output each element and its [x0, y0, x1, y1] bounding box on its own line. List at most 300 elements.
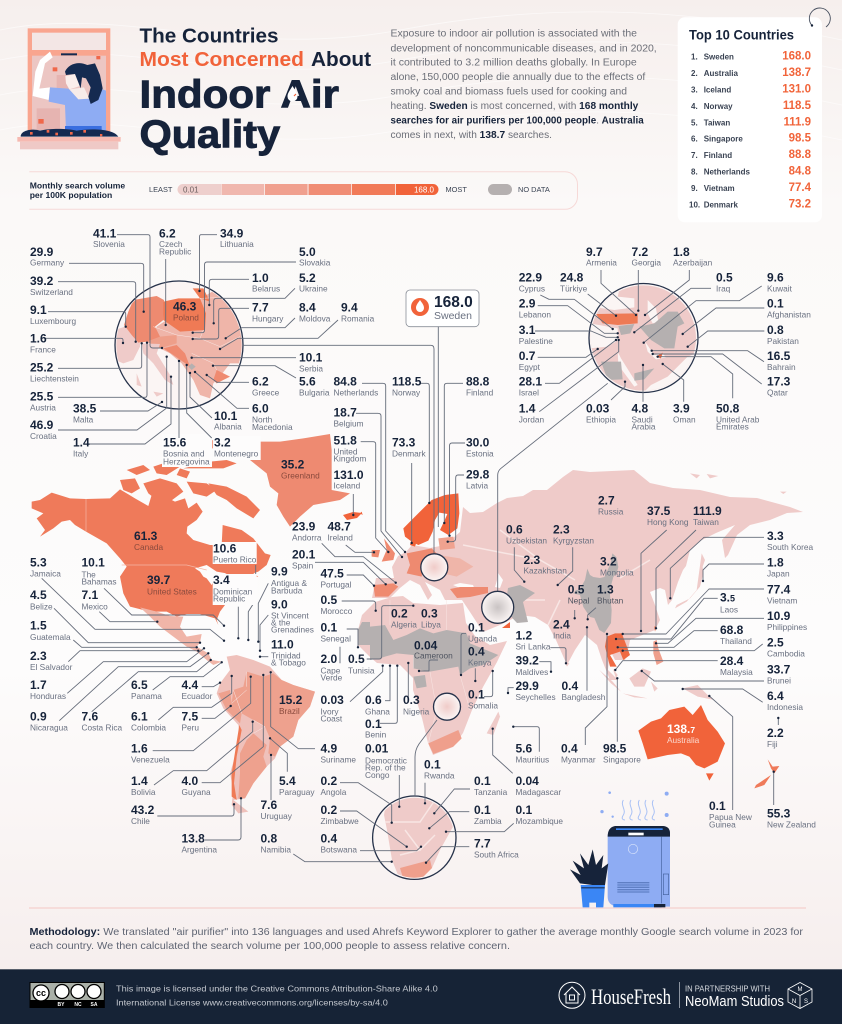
country label: Costa Rica: [82, 660, 211, 733]
country label: Serbia: 10.1: [299, 350, 323, 364]
country label: Netherlands: [334, 375, 405, 552]
country label: Slovenia: 41.1: [93, 226, 117, 240]
map: Asian borders: [463, 530, 650, 625]
country label: Cape Verde: 2.0: [320, 652, 338, 666]
intro text: comes in next, with 138.7 searches.: [390, 130, 552, 141]
country label: Mauritius: [513, 727, 549, 765]
country label: United Kingdom: 51.8: [334, 433, 357, 447]
country label: Denmark: 73.3: [392, 436, 416, 450]
country label: Estonia: Estonia: [466, 449, 494, 459]
country label: Cape Verde: [320, 647, 343, 683]
country label: Algeria: 0.2: [391, 607, 408, 621]
country label: Spain: 20.1: [292, 548, 316, 562]
country label: United States: [147, 573, 197, 596]
country label: Hong Kong: [641, 504, 689, 631]
country label: Germany: [30, 245, 144, 312]
panel: top 10 countries: 5.: [691, 118, 698, 127]
country label: United Arab Emirates: [658, 357, 760, 432]
country label: Estonia: [450, 436, 494, 536]
callout: Sweden: Sweden: [434, 310, 472, 322]
country label: Laos: Laos: [720, 604, 738, 614]
country label: Israel: 28.1: [519, 375, 542, 389]
country label: Lithuania: Lithuania: [220, 239, 254, 249]
country label: Vietnam: [623, 582, 797, 634]
illustration: woman at window: [17, 28, 121, 149]
footer: HouseFresh: [591, 984, 671, 1009]
country label: Malaysia: Malaysia: [720, 667, 753, 677]
country label: Cape Verde: Verde: [320, 673, 343, 683]
country label: Estonia: 30.0: [466, 436, 490, 450]
country label: Saudi Arabia: 4.8: [632, 401, 649, 415]
panel: top 10 countries: Norway: [704, 102, 733, 111]
country label: Ethiopia: 0.03: [586, 401, 610, 415]
country label: Hong Kong: 37.5: [647, 504, 671, 518]
country label: Norway: 118.5: [392, 375, 422, 389]
country label: Madagascar: Madagascar: [516, 787, 561, 797]
country label: Guatemala: 1.5: [30, 618, 47, 632]
country label: Cameroon: [414, 638, 453, 671]
country label: New Zealand: 55.3: [767, 806, 791, 820]
country label: Thailand: Thailand: [720, 636, 752, 646]
country label: The Bahamas: [82, 556, 224, 626]
country label: Afghanistan: 0.1: [767, 297, 784, 311]
panel: top 10 countries: 88.8: [789, 149, 812, 161]
country label: Guyana: Guyana: [182, 787, 211, 797]
country label: Myanmar: Myanmar: [561, 755, 596, 765]
country label: Seychelles: [508, 679, 556, 702]
country label: Mexico: 7.1: [82, 588, 99, 602]
country label: Ecuador: Ecuador: [182, 691, 213, 701]
country label: Croatia: 46.9: [30, 418, 54, 432]
country label: Laos: [616, 591, 738, 639]
country label: United Kingdom: [334, 433, 388, 552]
panel: top 10 countries: Denmark: [704, 201, 738, 210]
country label: Costa Rica: Costa Rica: [82, 723, 122, 733]
country label: Canada: [134, 529, 163, 552]
country label: Cambodia: Cambodia: [767, 649, 805, 659]
country label: Kazakhstan: 2.3: [524, 553, 541, 567]
country label: Egypt: 0.7: [519, 349, 536, 363]
country label: Belarus: [209, 271, 280, 305]
country label: Bolivia: Bolivia: [131, 787, 156, 797]
country label: Myanmar: 0.4: [561, 742, 578, 756]
country label: Zambia: [429, 803, 502, 828]
country label: United Arab Emirates: United Arab: [716, 414, 760, 424]
country label: Dominican Republic: Dominican: [213, 586, 253, 596]
country label: Slovakia: [193, 245, 331, 333]
zoom circle: Europe: [115, 281, 247, 409]
country label: Serbia: [192, 350, 323, 373]
country label: Kenya: 0.4: [468, 645, 485, 659]
country label: Kazakhstan: [524, 553, 567, 575]
country label: Panama: 6.5: [131, 678, 148, 692]
country label: Russia: [598, 493, 624, 516]
intro text: searches for air purifiers per 100,000 people. Australia: [390, 116, 644, 127]
country label: Mozambique: Mozambique: [516, 816, 563, 826]
country label: Greece: [207, 375, 280, 398]
country label: Algeria: Algeria: [391, 619, 417, 629]
icon: Creative Commons badge: [30, 982, 105, 1008]
country label: Maldives: 39.2: [516, 654, 539, 668]
country label: Lebanon: 2.9: [519, 297, 536, 311]
country label: Malaysia: [615, 654, 753, 677]
country label: Namibia: Namibia: [260, 845, 291, 855]
country label: Canada: 61.3: [134, 529, 158, 543]
country label: Malta: Malta: [73, 414, 94, 424]
country label: Laos: 3.5: [720, 591, 735, 605]
panel: top 10 countries: Netherlands: [704, 168, 750, 177]
country label: Pakistan: [688, 323, 799, 347]
divider: [29, 907, 806, 909]
country label: Morocco: [320, 593, 376, 616]
country label: Libya: 0.3: [421, 607, 438, 621]
country label: Democratic Republic of the Congo: [365, 742, 407, 807]
country label: Kyrgyzstan: [553, 522, 594, 585]
country label: Maldives: Maldives: [516, 667, 548, 677]
country label: Jamaica: [30, 556, 224, 641]
country label: Bosnia and Herzegovina: [163, 361, 210, 466]
country label: Romania: [220, 301, 375, 349]
country label: Seychelles: 29.9: [516, 679, 539, 693]
country label: Paraguay: Paraguay: [279, 787, 315, 797]
country label: Brunei: [642, 662, 791, 685]
country label: Israel: [519, 340, 616, 398]
country label: Kuwait: Kuwait: [767, 284, 793, 294]
country label: Rwanda: [424, 757, 455, 803]
country label: Mexico: Mexico: [82, 601, 108, 611]
title: Quality: [140, 114, 281, 157]
country label: Dominican Republic: 3.4: [213, 573, 230, 587]
country label: Taiwan: Taiwan: [693, 517, 719, 527]
country label: The Bahamas: Bahamas: [82, 576, 117, 586]
intro text: heating. Sweden is most concerned, with 168 monthly: [390, 101, 639, 112]
country label: Kazakhstan: Kazakhstan: [524, 565, 567, 575]
country label: Antigua and Barbuda: 9.9: [271, 565, 288, 579]
country label: South Korea: 3.3: [767, 529, 784, 543]
country label: Philippines: 10.9: [767, 609, 791, 623]
country label: Ivory Coast: [320, 666, 383, 724]
country label: Honduras: 1.7: [30, 678, 47, 692]
panel: top 10 countries: 111.9: [783, 116, 811, 128]
country label: Palestine: Palestine: [519, 336, 553, 346]
country label: Philippines: [656, 609, 807, 643]
country label: Sri Lanka: 1.2: [516, 628, 533, 642]
country label: Cyprus: Cyprus: [519, 284, 545, 294]
country label: Bhutan: [588, 582, 624, 619]
panel: top 10 countries: 2.: [691, 69, 698, 78]
country label: Guatemala: [30, 618, 197, 647]
country label: Albania: Albania: [214, 422, 242, 432]
country label: Australia: Australia: [667, 735, 700, 745]
country label: Bosnia and Herzegovina: Herzegovina: [163, 456, 210, 466]
country label: Namibia: [260, 832, 392, 862]
country label: Iraq: [634, 271, 733, 332]
country label: Brazil: [279, 693, 303, 716]
country label: Botswana: Botswana: [320, 845, 357, 855]
country label: Nepal: [568, 582, 590, 618]
country label: Puerto Rico: [213, 541, 257, 640]
country label: Bolivia: 1.4: [131, 774, 148, 788]
panel: top 10 countries: 9.: [691, 184, 698, 193]
country label: Liechtenstein: 25.2: [30, 361, 54, 375]
country label: The Bahamas: 10.1: [82, 556, 105, 570]
country label: Latvia: 29.8: [466, 468, 490, 482]
country label: Czech Republic: [159, 226, 191, 325]
country label: Georgia: Georgia: [632, 258, 661, 268]
country label: Paraguay: 5.4: [279, 774, 296, 788]
country label: Bahrain: Bahrain: [767, 362, 796, 372]
country label: Suriname: [271, 672, 356, 765]
country label: Netherlands: 84.8: [334, 375, 357, 389]
country label: Italy: Italy: [73, 449, 89, 459]
country label: Uzbekistan: [506, 522, 547, 582]
intro text: smoky coal and biomass fuels used for cooking and: [390, 86, 627, 97]
panel: top 10 countries: Singapore: [704, 135, 743, 144]
country label: Angola: 0.2: [320, 774, 338, 788]
map: Europe: [360, 493, 473, 597]
country label: Taiwan: 111.9: [693, 504, 722, 518]
panel: top 10 countries: 7.: [691, 151, 698, 160]
panel: top 10 countries: 73.2: [789, 199, 811, 211]
country label: Czech Republic: Republic: [159, 246, 191, 256]
country label: Trinidad and Tobago: & Tobago: [271, 658, 306, 668]
panel: top 10 countries: 84.8: [789, 166, 812, 178]
country label: Slovakia: Slovakia: [299, 258, 331, 268]
country label: Egypt: [519, 349, 598, 372]
country label: Jordan: [519, 340, 619, 424]
country label: Kenya: Kenya: [468, 658, 492, 668]
intro text: [390, 29, 657, 141]
icon: Creative Commons badge: cc: [36, 988, 46, 998]
country label: Rwanda: 0.1: [424, 757, 441, 771]
country label: Panama: Panama: [131, 691, 162, 701]
country label: Italy: 1.4: [73, 436, 90, 450]
country label: St Vincent and the Grenadines: [260, 597, 314, 651]
country label: Montenegro: 3.2: [214, 436, 231, 450]
intro text: Exposure to indoor air pollution is associated with the: [390, 29, 637, 40]
country label: Croatia: [30, 357, 167, 441]
country label: Germany: 29.9: [30, 245, 54, 259]
country label: Cyprus: [519, 271, 613, 329]
country label: Japan: Japan: [767, 569, 790, 579]
country label: France: [30, 331, 123, 355]
map: Indonesia and Oceania: [564, 662, 779, 788]
country label: Jordan: 1.4: [519, 401, 536, 415]
small zoom markers: [421, 554, 514, 720]
country label: El Salvador: El Salvador: [30, 662, 73, 672]
country label: Denmark: [392, 436, 427, 543]
country label: Uzbekistan: 0.6: [506, 522, 523, 536]
country label: Lebanon: Lebanon: [519, 310, 551, 320]
country label: Antigua and Barbuda: Antigua &: [271, 578, 307, 588]
country label: Democratic Republic of the Congo: Rep. of the: [365, 763, 406, 773]
country label: Taiwan: [656, 504, 722, 628]
country label: Türkiye: Türkiye: [560, 284, 588, 294]
country label: Ivory Coast: Ivory: [320, 706, 339, 716]
callout: Sweden: [406, 290, 479, 527]
country label: Switzerland: 39.2: [30, 274, 54, 288]
country label: India: [553, 617, 571, 640]
country label: Angola: [320, 774, 392, 823]
country label: Zambia: 0.1: [474, 803, 491, 817]
country label: Nepal: 0.5: [568, 582, 585, 596]
country label: Mongolia: 3.2: [600, 555, 617, 569]
panel: top 10 countries: Taiwan: [704, 118, 730, 127]
map: Eurasia: [372, 470, 803, 680]
title: About: [311, 49, 371, 71]
country label: Czech Republic: Czech: [159, 239, 183, 249]
country label: Bahrain: [652, 349, 796, 372]
country label: Japan: 1.8: [767, 556, 784, 570]
country label: Finland: [444, 375, 494, 523]
country label: Nigeria: Nigeria: [403, 706, 430, 716]
country label: Qatar: [653, 354, 791, 398]
methodology: each country. We then calculated the search volume per 100,000 people to assess relative concern.: [30, 941, 510, 952]
country label: Paraguay: [270, 738, 315, 797]
country label: South Africa: [426, 837, 519, 863]
country label: Cameroon: Cameroon: [414, 650, 453, 660]
panel: top 10 countries: Vietnam: [704, 184, 735, 193]
country label: Qatar: Qatar: [767, 388, 788, 398]
country label: Greece: Greece: [252, 388, 280, 398]
icon: Creative Commons badge: SA: [91, 1002, 98, 1008]
country label: Dominican Republic: Republic: [213, 594, 245, 604]
country label: Singapore: [603, 678, 641, 765]
country label: Egypt: Egypt: [519, 362, 541, 372]
legend: [29, 172, 578, 209]
country label: Nigeria: 0.3: [403, 693, 420, 707]
country label: India: 2.4: [553, 617, 570, 631]
country label: Costa Rica: 7.6: [82, 710, 99, 724]
country label: Afghanistan: [683, 297, 811, 334]
country label: Colombia: Colombia: [131, 723, 166, 733]
country label: Lithuania: 34.9: [220, 226, 244, 240]
country label: Andorra: [292, 519, 396, 583]
country label: Antigua and Barbuda: [258, 565, 307, 642]
country label: Azerbaijan: [645, 245, 713, 315]
country label: Madagascar: 0.04: [516, 774, 539, 788]
country label: Georgia: 7.2: [632, 245, 649, 259]
country label: Slovakia: 5.0: [299, 245, 316, 259]
country label: Benin: 0.1: [365, 717, 382, 731]
country label: Saudi Arabia: Arabia: [632, 422, 656, 432]
country label: South Korea: South Korea: [767, 542, 814, 552]
panel: top 10 countries: Australia: [704, 69, 738, 78]
country label: Andorra: Andorra: [292, 532, 322, 542]
country label: Australia: [667, 722, 700, 745]
country label: Jamaica: Jamaica: [30, 569, 61, 579]
country label: Pakistan: Pakistan: [767, 336, 799, 346]
country label: Indonesia: 6.4: [767, 689, 784, 703]
country label: United Kingdom: United: [334, 446, 358, 456]
country label: Greece: 6.2: [252, 375, 269, 389]
country label: Botswana: [320, 832, 421, 855]
country label: Botswana: 0.4: [320, 832, 338, 846]
country label: Nicaragua: 0.9: [30, 710, 47, 724]
country label: Mauritius: Mauritius: [516, 755, 549, 765]
title: The Countries: [140, 25, 278, 47]
country label: Tanzania: Tanzania: [474, 787, 508, 797]
intro text: alone, 150,000 people die annually due to the effects of: [390, 72, 646, 83]
country label: Austria: [30, 343, 147, 413]
country label: Mexico: [82, 588, 157, 622]
country label: Bangladesh: 0.4: [562, 679, 579, 693]
illustration: air purifier and plant: [570, 791, 670, 907]
intro text: it contributed to 3.2 million deaths globally. In Europe: [390, 58, 637, 69]
country label: Kuwait: [644, 271, 793, 343]
country label: Afghanistan: Afghanistan: [767, 310, 811, 320]
country label: Portugal: Portugal: [320, 580, 352, 590]
country label: Thailand: [618, 623, 752, 647]
country label: Switzerland: [30, 274, 136, 342]
country label: Uganda: 0.1: [468, 621, 485, 635]
country label: Panama: [131, 662, 222, 701]
country label: Brunei: 33.7: [767, 662, 791, 676]
country label: Myanmar: [561, 634, 607, 765]
country label: Greenland: 35.2: [281, 457, 305, 471]
country label: Liechtenstein: [30, 343, 142, 384]
country label: Morocco: 0.5: [320, 593, 338, 607]
country label: Peru: Peru: [182, 723, 199, 733]
country label: Switzerland: Switzerland: [30, 287, 73, 297]
country label: Azerbaijan: 1.8: [673, 245, 690, 259]
country label: El Salvador: [30, 649, 198, 672]
country label: Moldova: 8.4: [299, 301, 316, 315]
country label: Jordan: Jordan: [519, 414, 544, 424]
country label: Senegal: 0.1: [320, 620, 338, 634]
country label: Guatemala: Guatemala: [30, 632, 71, 642]
country label: Guyana: 4.0: [182, 774, 199, 788]
country label: El Salvador: 2.3: [30, 649, 47, 663]
country label: Namibia: 0.8: [260, 832, 278, 846]
country label: Democratic Republic of the Congo: 0.01: [365, 742, 389, 756]
country label: Tunisia: [348, 606, 413, 675]
country label: Libya: [421, 607, 441, 629]
country label: North Macedonia: Macedonia: [252, 422, 293, 432]
country label: Ireland: Ireland: [328, 532, 353, 542]
legend: Monthly search volume: [30, 180, 125, 190]
panel: top 10 countries: 8.: [691, 168, 698, 177]
country label: Zimbabwe: Zimbabwe: [320, 816, 359, 826]
icon: Creative Commons badge: NC: [74, 1002, 82, 1008]
country label: Armenia: Armenia: [586, 258, 617, 268]
country label: Fiji: [767, 718, 784, 749]
country label: Hong Kong: Hong Kong: [647, 517, 689, 527]
panel: top 10 countries: [678, 8, 830, 222]
title: Most Concerned: [140, 49, 304, 71]
country label: Georgia: [632, 245, 661, 311]
logo: NeoMam cube: S: [804, 999, 808, 1005]
country label: Spain: [292, 548, 386, 584]
country label: Bangladesh: Bangladesh: [562, 692, 606, 702]
country label: Indonesia: Indonesia: [767, 702, 803, 712]
country label: Australia: 138.7: [667, 722, 695, 736]
country label: Austria: Austria: [30, 403, 56, 413]
panel: top 10 countries: 118.5: [783, 100, 812, 112]
country label: Trinidad and Tobago: Trinidad: [271, 650, 301, 660]
country label: Luxembourg: [30, 303, 126, 327]
panel: top 10 countries: Sweden: [704, 52, 734, 62]
country label: Russia: Russia: [598, 506, 624, 516]
country label: Madagascar: [493, 729, 561, 797]
country label: Trinidad and Tobago: [260, 637, 306, 668]
panel: top 10 countries: 138.7: [782, 67, 811, 79]
country label: Belgium: 18.7: [334, 406, 357, 420]
country label: Fiji: Fiji: [767, 739, 778, 749]
country label: France: France: [30, 345, 56, 355]
country label: Oman: Oman: [673, 414, 696, 424]
white label backing: Montenegro: [213, 436, 261, 460]
